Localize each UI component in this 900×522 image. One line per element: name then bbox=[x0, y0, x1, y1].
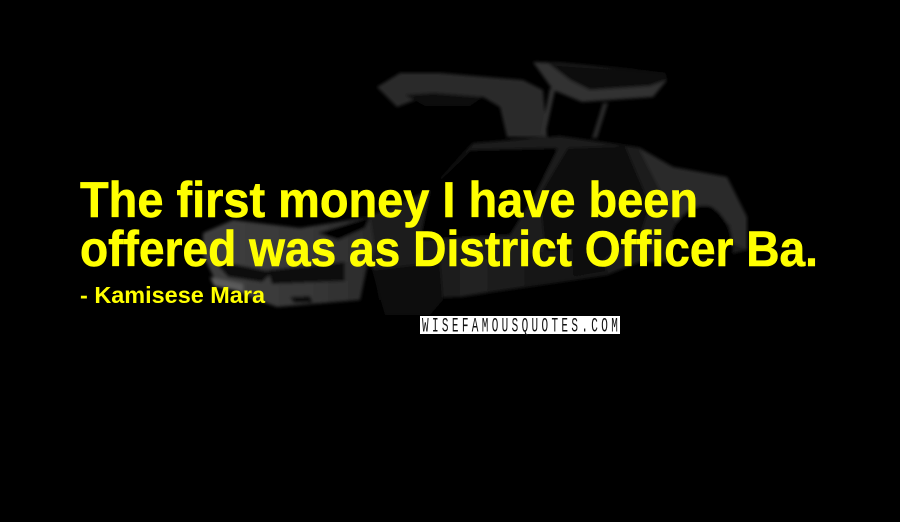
left gull-wing door bbox=[377, 73, 547, 137]
hood and front bumper bbox=[203, 217, 375, 307]
background car photograph bbox=[203, 62, 747, 315]
front wheel bbox=[372, 262, 443, 315]
right gull-wing door bbox=[533, 62, 667, 138]
quote line 2: offered was as District Officer Ba. bbox=[80, 221, 818, 277]
watermark badge: WISEFAMOUSQUOTES.COM bbox=[422, 315, 618, 338]
car side and rear bbox=[360, 136, 747, 300]
quote line 1: The first money I have been bbox=[80, 172, 698, 228]
quote text bbox=[80, 172, 818, 277]
author attribution: - Kamisese Mara bbox=[80, 282, 265, 308]
